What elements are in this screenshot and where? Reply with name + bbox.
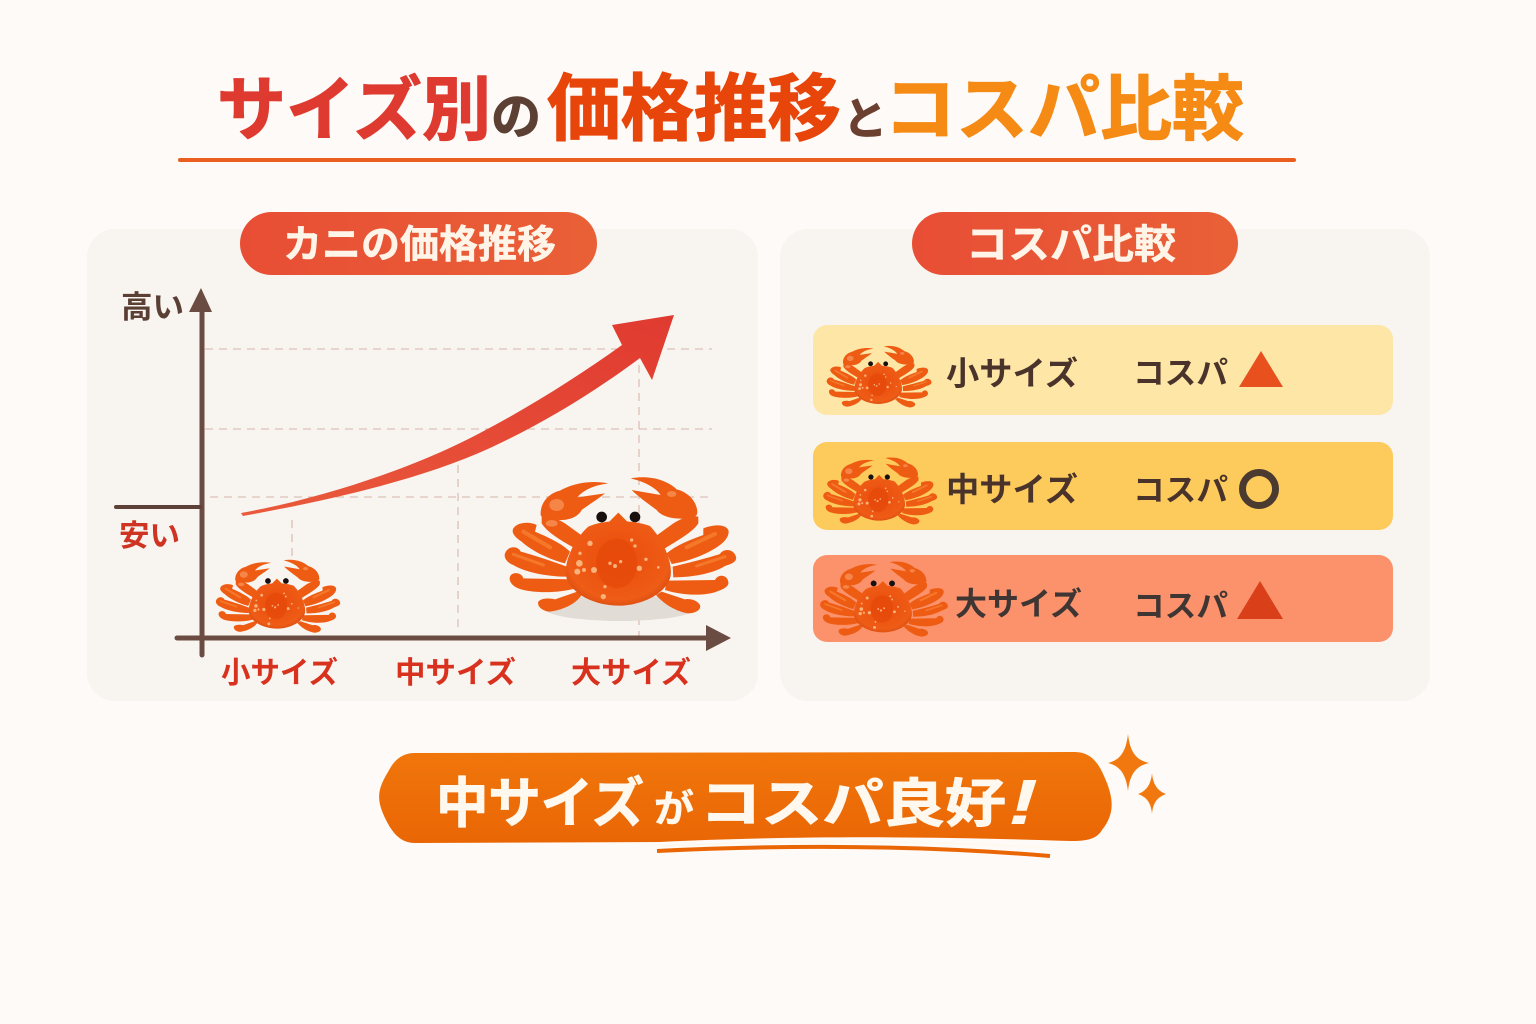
title — [217, 69, 1244, 150]
banner underline — [657, 842, 1050, 856]
banner text: 中サイズ — [436, 774, 644, 834]
row: large size — [813, 555, 1393, 642]
shadow: large crab — [544, 595, 696, 621]
price trend arrow — [241, 315, 674, 516]
conclusion banner — [379, 752, 1112, 856]
rating: triangle — [1239, 351, 1283, 387]
label: value: コスパ — [1133, 473, 1228, 508]
title: 価格推移 — [547, 69, 841, 150]
x label: large: 大サイズ — [571, 656, 691, 690]
label: large size: 大サイズ — [955, 586, 1082, 622]
y label: low: 安い — [119, 520, 180, 553]
rating: circle — [1242, 472, 1276, 506]
banner text: が — [654, 789, 694, 831]
panel heading: value comparison: コスパ比較 — [966, 223, 1176, 267]
panel: price trend — [87, 212, 758, 701]
panel heading: value comparison — [912, 212, 1238, 275]
row: medium size — [813, 442, 1393, 530]
crab icon: medium row — [823, 458, 937, 524]
title: の — [491, 89, 541, 145]
crab icon: small row — [827, 346, 932, 407]
y axis — [116, 288, 212, 655]
crab icon: large row — [820, 562, 948, 637]
row: small size — [813, 325, 1393, 415]
label: small size: 小サイズ — [946, 355, 1078, 392]
panel heading: price trend — [240, 212, 597, 275]
rating: triangle — [1237, 581, 1283, 619]
x label: small: 小サイズ — [221, 656, 338, 690]
title: サイズ別 — [217, 71, 491, 149]
crab: large — [505, 477, 736, 613]
banner text — [436, 766, 1038, 838]
title: と — [843, 95, 887, 144]
x axis — [177, 625, 731, 651]
label: value: コスパ — [1133, 589, 1228, 624]
banner text: ! — [1008, 766, 1038, 838]
label: value: コスパ — [1133, 356, 1228, 391]
panel heading: price trend: カニの価格推移 — [283, 224, 556, 267]
panel: value comparison — [780, 212, 1430, 701]
crab: small — [216, 560, 340, 633]
chart grid — [205, 349, 712, 636]
title underline — [178, 158, 1296, 162]
title: コスパ比較 — [884, 71, 1244, 150]
banner text: コスパ良好 — [700, 776, 1006, 834]
sparkles — [1108, 734, 1166, 814]
x label: medium: 中サイズ — [395, 656, 516, 690]
y label: high: 高い — [121, 290, 184, 325]
label: medium size: 中サイズ — [946, 471, 1078, 508]
